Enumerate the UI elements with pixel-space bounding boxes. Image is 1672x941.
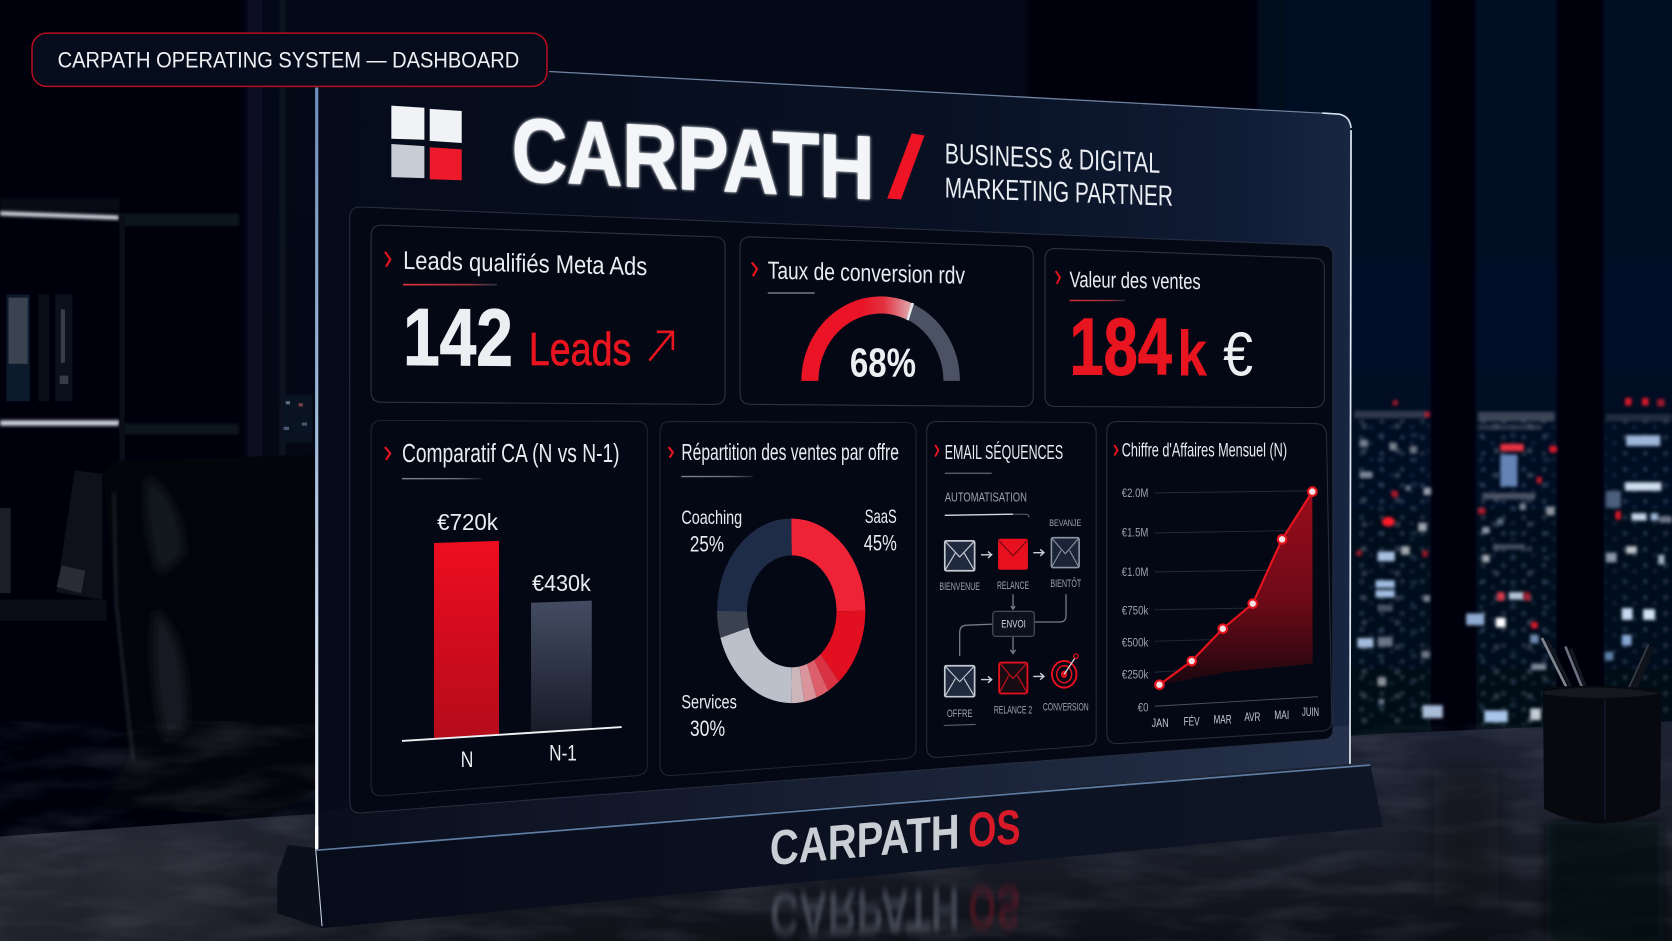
brand title: CARPATH [512, 99, 874, 218]
donut labels: Services [681, 692, 737, 713]
y axis labels: €250k [1122, 669, 1149, 682]
heading: revenue comparison: Comparatif CA (N vs N-1) [402, 440, 620, 468]
labels bottom row: CONVERSION [1043, 702, 1089, 714]
x axis labels [1152, 706, 1319, 730]
labels top row [939, 518, 1082, 593]
heading: sales value: Valeur des ventes [1070, 267, 1201, 294]
donut labels: Coaching [681, 508, 742, 529]
flow arrows bottom row [981, 673, 1044, 683]
x axis labels: MAI [1274, 709, 1289, 722]
panel: conversion gauge [740, 237, 1033, 406]
icon: email offre [945, 666, 975, 697]
labels bottom row: OFFRE [947, 708, 972, 720]
bookshelf [0, 198, 312, 621]
x axis labels: MAR [1213, 713, 1232, 726]
area and line series [1155, 487, 1317, 689]
y axis labels: €0 [1138, 702, 1149, 715]
labels bottom row [944, 702, 1089, 725]
pen holder [1542, 638, 1661, 824]
labels top row: RELANCE [997, 580, 1029, 592]
y axis labels: €500k [1122, 637, 1149, 650]
gauge: 68% [850, 340, 916, 386]
axis and bar labels [402, 509, 622, 772]
x axis labels: AVR [1244, 711, 1260, 724]
panel: sales value [1045, 249, 1324, 408]
bar: N-1 [531, 601, 592, 733]
x axis labels: FÉV [1184, 715, 1200, 728]
top label pill: CARPATH OPERATING SYSTEM — DASHBOARD [58, 48, 519, 73]
axis and bar labels: €430k [532, 570, 591, 596]
panel: email sequences: AUTOMATISATION [945, 489, 1027, 504]
base logo: CARPATH [770, 804, 960, 876]
heading: conversion: Taux de conversion rdv [768, 257, 966, 290]
flow connectors [960, 594, 1066, 656]
labels top row: BIENTÔT [1050, 577, 1082, 590]
base logo: OS [968, 800, 1020, 858]
value: 142 leads: 142 [403, 293, 513, 384]
panel: sales split donut [660, 421, 916, 776]
axis and bar labels: N [461, 747, 473, 772]
heading: email sequences: EMAIL SÉQUENCES [945, 441, 1063, 464]
labels bottom row: RELANCE 2 [994, 705, 1032, 717]
icon: email bienvenue [945, 541, 975, 571]
labels top row: BEVANJE [1049, 518, 1081, 529]
flow arrows top row [981, 549, 1044, 558]
brand tagline [945, 138, 1173, 213]
base logo reflection: OS [968, 873, 1020, 941]
logo mark [391, 106, 462, 180]
desk surface [0, 721, 1672, 941]
gauge [810, 303, 952, 386]
leather office chair [103, 454, 316, 818]
donut labels: 25% [690, 532, 724, 557]
heading: monthly revenue: Chiffre d'Affaires Mensuel (N) [1122, 441, 1287, 462]
envoi node [993, 611, 1034, 636]
y axis labels [1122, 487, 1149, 715]
icon: email relance [998, 539, 1028, 570]
y axis labels: €750k [1122, 605, 1149, 618]
labels top row: BIENVENUE [939, 581, 980, 593]
axis and bar labels: N-1 [549, 741, 577, 766]
x axis labels: JUIN [1302, 706, 1319, 719]
y axis labels: €1.0M [1122, 566, 1148, 579]
panel: leads: Leads [529, 323, 631, 375]
brand tagline: BUSINESS & DIGITAL [945, 138, 1160, 180]
glass panel [317, 59, 1351, 848]
y axis labels: €2.0M [1122, 487, 1148, 500]
heading: leads: Leads qualifiés Meta Ads [403, 247, 647, 281]
donut labels: 45% [864, 531, 897, 556]
city lights through window [1354, 398, 1672, 725]
panel: sales value: k [1177, 318, 1207, 390]
panel: revenue comparison bars [371, 420, 647, 796]
panel: leads [371, 225, 725, 404]
axis and bar labels: €720k [437, 509, 498, 535]
bar: N [434, 541, 499, 738]
dashboard backing panel [350, 207, 1333, 813]
panel: monthly revenue line chart [1107, 421, 1332, 744]
donut chart [717, 519, 865, 703]
icon: trend arrow [649, 332, 673, 361]
value: 184k euro: 184 [1070, 302, 1172, 392]
envoi node: ENVOI [1001, 618, 1026, 630]
heading: sales split: Répartition des ventes par offre [681, 439, 899, 465]
panel: email sequences [927, 421, 1096, 757]
x axis labels: JAN [1152, 717, 1169, 730]
donut labels: 30% [690, 716, 725, 741]
icon: target [1052, 654, 1078, 688]
icon: email bientot [1051, 538, 1079, 568]
panel: sales value: € [1223, 321, 1253, 390]
donut labels [681, 507, 897, 741]
y axis labels: €1.5M [1122, 527, 1148, 540]
donut labels: SaaS [865, 507, 897, 528]
icon: email relance 2 [999, 663, 1027, 693]
top label pill [32, 33, 547, 86]
brand tagline: MARKETING PARTNER [945, 172, 1173, 213]
stand base [277, 764, 1383, 928]
